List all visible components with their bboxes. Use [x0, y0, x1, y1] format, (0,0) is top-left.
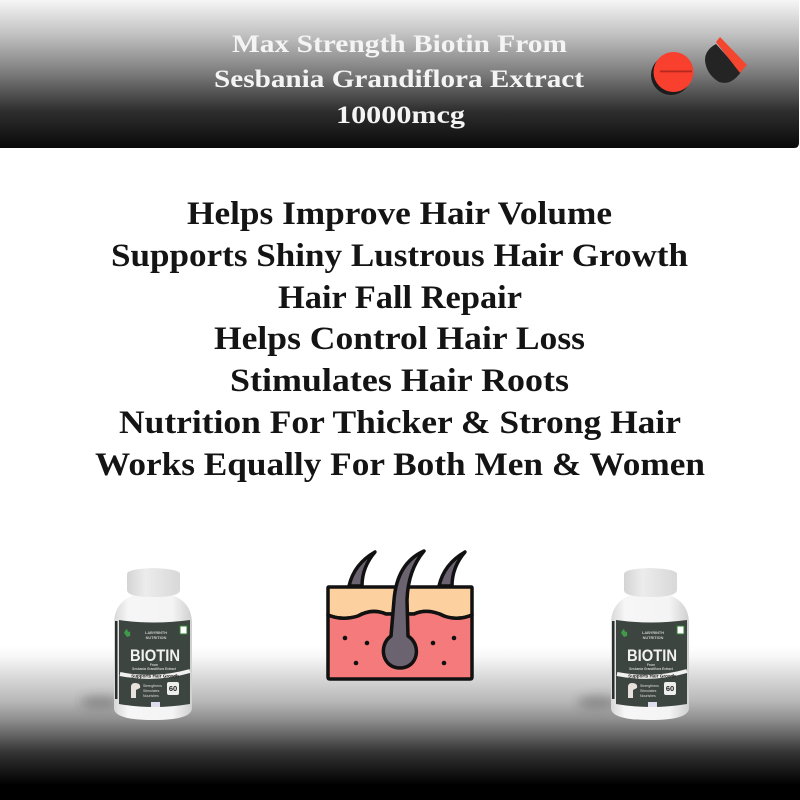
bottle left: Stimulates [143, 689, 160, 693]
bottle body [114, 594, 192, 720]
bottle shadow [577, 696, 617, 708]
black sliver at label edge [115, 621, 118, 699]
bottle left: From [150, 663, 158, 667]
bottle right: Nourishes [640, 694, 656, 698]
bottle right: BIOTIN [627, 646, 677, 665]
bottle label [119, 620, 190, 707]
label text: LABYRINTH [642, 631, 664, 635]
bottle right: Stimulates [640, 689, 657, 693]
label white band [617, 671, 687, 677]
benefits list: Stimulates Hair Roots [230, 363, 569, 399]
bottle left: BIOTIN [130, 646, 180, 665]
icon: split tablet [705, 37, 747, 83]
black sliver at label edge [612, 621, 614, 699]
bottle right [577, 568, 689, 720]
bottle label [616, 620, 687, 707]
benefits list: Hair Fall Repair [278, 280, 522, 316]
header title: Sesbania Grandiflora Extract [214, 64, 585, 93]
inner skin layer [328, 611, 472, 679]
bottle left: Sesbania Grandiflora Extract [132, 667, 177, 671]
header title: 10000mcg [336, 100, 465, 129]
benefits list [95, 196, 705, 483]
bottle right: NUTRITION [643, 636, 664, 640]
bottle right: Strengthens [640, 684, 659, 688]
header title [214, 29, 585, 129]
follicle dots [343, 636, 456, 665]
bottle body [611, 594, 689, 720]
bottle cap [624, 568, 677, 597]
icon: red round tablet [651, 52, 694, 95]
bottle right: From [647, 663, 655, 667]
bottle left: Strengthens [143, 684, 162, 688]
label text: LABYRINTH [145, 631, 167, 635]
outer skin layer [328, 587, 472, 618]
label white band [120, 671, 190, 677]
bottle cap [127, 568, 180, 597]
bottle left: Supports Hair Growth [131, 674, 179, 678]
bottle left [80, 568, 192, 720]
bottle right: Sesbania Grandiflora Extract [629, 667, 674, 671]
benefits list: Nutrition For Thicker & Strong Hair [119, 405, 681, 441]
bottom gradient band [0, 645, 800, 800]
side hair right [439, 552, 465, 586]
bottle left: 60 [169, 684, 177, 693]
benefits list: Works Equally For Both Men & Women [95, 447, 705, 483]
benefits list: Helps Improve Hair Volume [187, 196, 612, 232]
header band [0, 0, 799, 148]
side hair left [349, 552, 375, 586]
benefits list: Helps Control Hair Loss [214, 321, 585, 357]
bottle left: Nourishes [143, 694, 159, 698]
header title: Max Strength Biotin From [232, 29, 567, 58]
benefits list: Supports Shiny Lustrous Hair Growth [111, 238, 688, 274]
icon: hair follicle in skin [328, 551, 472, 679]
central hair and root [383, 551, 424, 668]
bottle left: NUTRITION [146, 636, 167, 640]
bottle shadow [80, 696, 120, 708]
bottle right: 60 [666, 684, 674, 693]
bottle right: Supports Hair Growth [628, 674, 676, 678]
